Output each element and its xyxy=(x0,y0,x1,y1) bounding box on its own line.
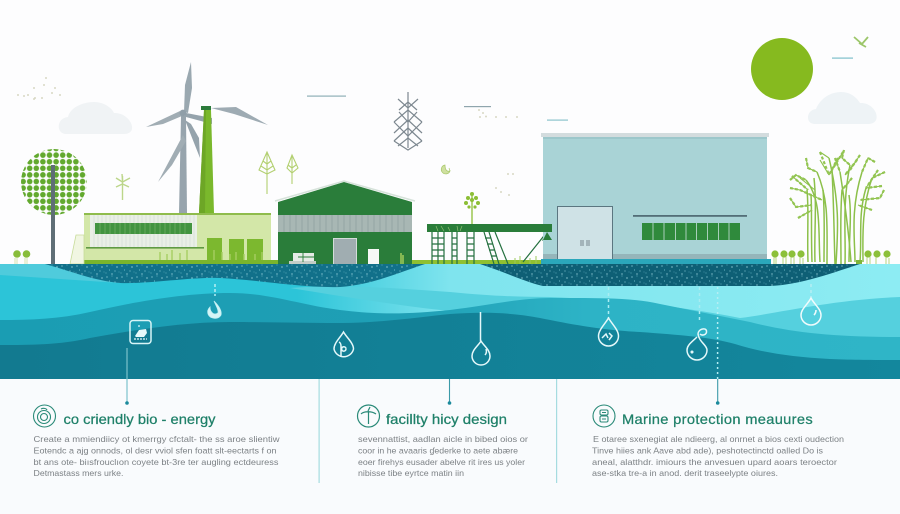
heading: bio-energy: co criendly bio - energy xyxy=(64,411,216,427)
sky accents xyxy=(17,58,853,196)
line trees xyxy=(259,152,298,194)
icon: marine badge xyxy=(593,405,615,427)
building window xyxy=(633,215,747,240)
text block: bio-energy: Eotendc a ajg onnods, ol desr vviol sfen foatt slt-eectarts f on xyxy=(34,446,277,456)
icon: bird xyxy=(854,37,868,47)
tree: dotted left tree xyxy=(21,149,87,265)
small palm plant xyxy=(116,174,130,200)
heading: facility design: facillty hicy design xyxy=(386,411,507,427)
connector line: first column xyxy=(125,348,129,405)
text block: bio-energy: Detmastass mers urke. xyxy=(34,468,124,478)
text block: facility design: coor in he avaaris ɠederke to aete abære xyxy=(358,446,518,456)
text block: bio-energy xyxy=(34,434,280,478)
wind turbine xyxy=(146,62,212,213)
factory window xyxy=(95,223,192,234)
lattice tower xyxy=(394,92,422,150)
text block: facility design: sevennattist, aadlan aicle in bibed oios or xyxy=(358,434,528,444)
panel: marine protection xyxy=(592,405,844,478)
water: light mid layer xyxy=(290,286,900,345)
connector line: third column xyxy=(716,379,720,405)
connector line: second column xyxy=(448,379,451,405)
text block: bio-energy: bt ans ote- biısfrouclıon coyete bt-3re ter augling ectdeuress xyxy=(34,457,278,467)
icon: drop with leaf xyxy=(334,332,354,357)
water: speckled seabed xyxy=(45,264,860,287)
text block: marine protection: ase-stka tre-a in anod. derit traseelypte oiures. xyxy=(592,468,778,478)
water layers xyxy=(0,264,900,379)
barn door xyxy=(334,238,356,264)
water: deep layer xyxy=(0,313,900,379)
panel: facility design xyxy=(358,405,528,478)
icon: dashed line and drop with swirl xyxy=(598,287,618,346)
tree: right bamboo grove xyxy=(790,150,885,264)
panel: bio-energy xyxy=(34,405,280,478)
barn machine xyxy=(289,253,316,264)
water: mid layer xyxy=(0,293,900,379)
factory doors xyxy=(207,238,263,264)
small round trees right xyxy=(771,250,891,264)
chimney xyxy=(199,106,214,213)
small round trees left xyxy=(13,250,30,264)
text block: marine protection: aneal, alatthdr. imiours the anvesuen upard aoars teroector xyxy=(592,457,837,467)
icon: upper right drop xyxy=(801,284,821,325)
platform plant xyxy=(464,192,480,224)
icon: spiral xyxy=(34,405,56,427)
text block: facility design xyxy=(358,434,528,478)
icon: water hook xyxy=(208,284,221,318)
sun xyxy=(751,38,813,100)
water: top layer xyxy=(0,264,900,379)
text block: facility design: eoer firehys eusader abelve rit ires us yoler xyxy=(358,457,525,467)
heading: marine protection: Marine protection meauures xyxy=(622,411,813,427)
text block: facility design: nibisse tibe eyrtce matin iin xyxy=(358,468,464,478)
building door xyxy=(558,206,612,260)
text block: marine protection: E otaree sxenegiat ale ndieerg, al onrnet a bios cexti oudection xyxy=(593,434,844,444)
column divider right xyxy=(556,379,557,483)
bottom panel background xyxy=(0,379,900,514)
icon: sprout circle xyxy=(358,405,380,427)
barn slats xyxy=(278,215,412,232)
icon: line and drop xyxy=(472,312,490,365)
icon: rounded square house xyxy=(130,320,151,344)
text block: marine protection: Tinve hiies ank Aave abd ade), peshotectinctd oalled Do is xyxy=(592,446,823,456)
text block: bio-energy: Create a mmiendiicy ot kmerrgy cfctalt- the ss aroe slientiw xyxy=(34,434,280,444)
large building xyxy=(541,133,771,264)
column divider left xyxy=(318,379,320,483)
cloud: left xyxy=(59,102,132,134)
ground strip xyxy=(412,260,542,264)
text block: marine protection xyxy=(592,434,844,478)
icon: drop with loop xyxy=(687,287,707,360)
barn white door xyxy=(368,249,379,264)
icon: dotted line xyxy=(717,287,719,379)
barn xyxy=(275,181,415,265)
platform corner over building xyxy=(530,224,552,240)
cloud: right xyxy=(808,92,877,124)
wind turbine blade over chimney xyxy=(211,107,268,125)
factory building xyxy=(70,213,278,264)
platform with ladders xyxy=(427,192,552,264)
